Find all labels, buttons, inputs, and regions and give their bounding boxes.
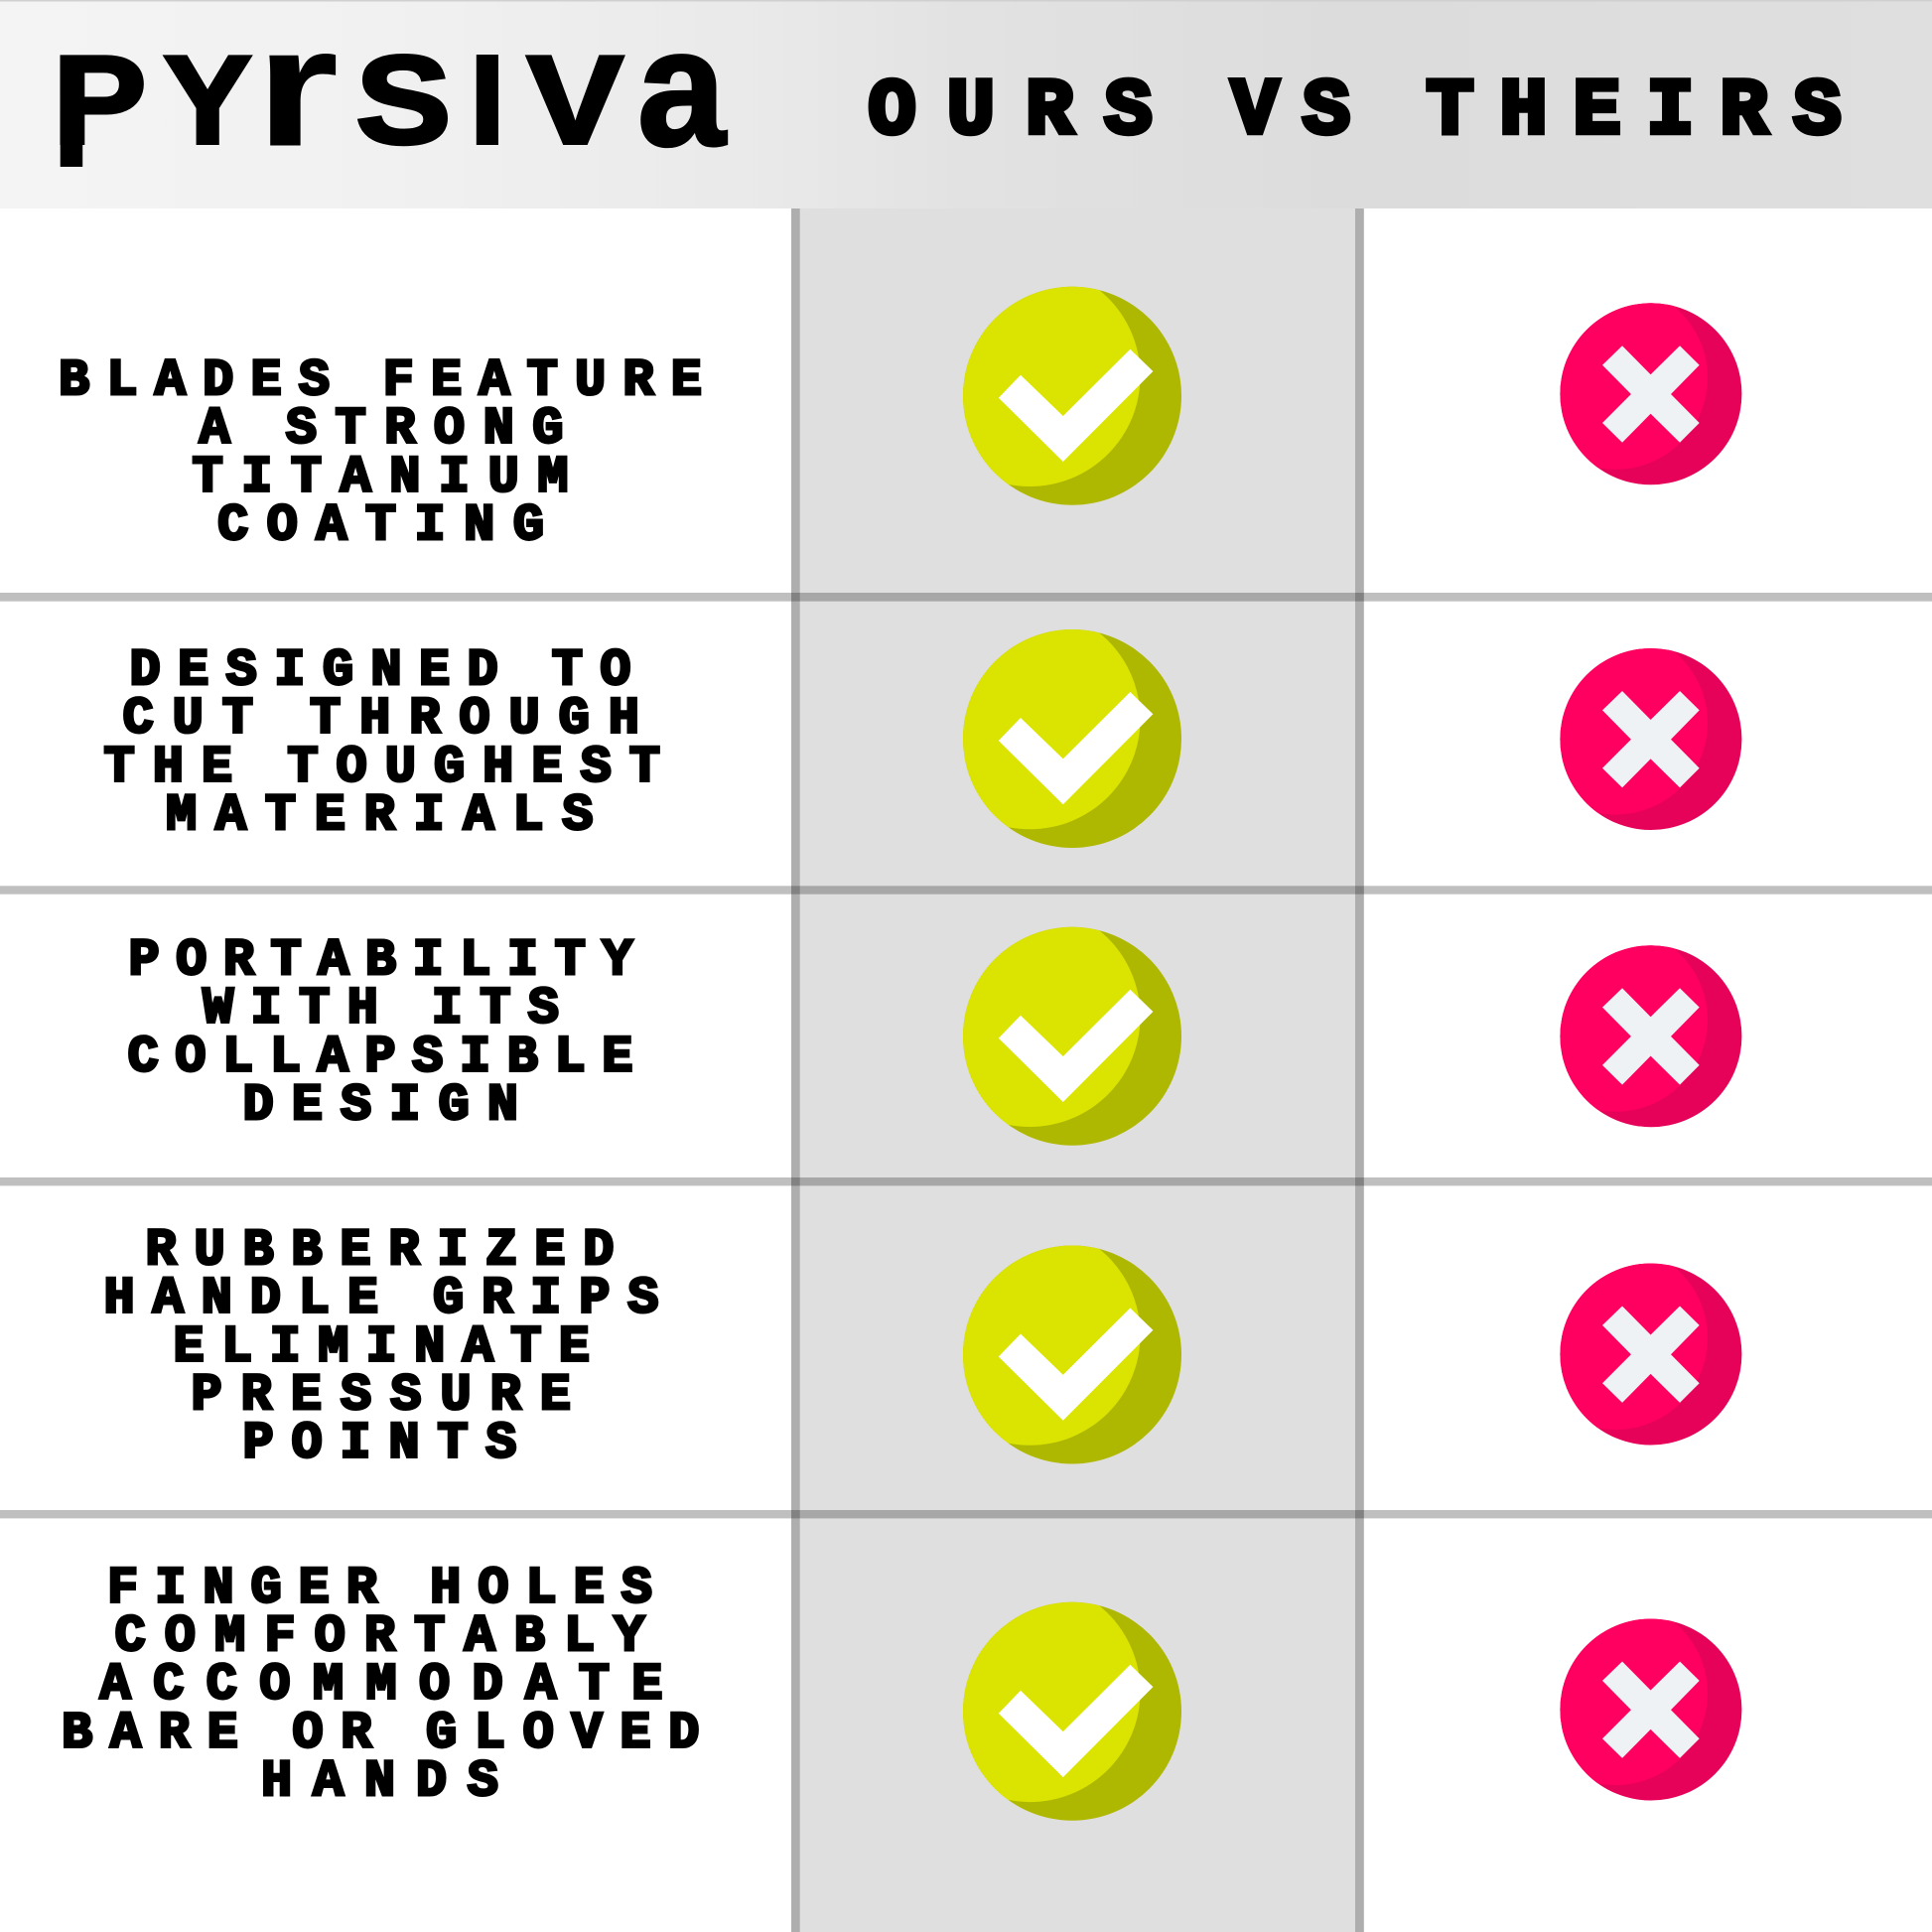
panel: ours column background	[791, 208, 1364, 1932]
label: row 4 text: HANDLE GRIPS	[103, 1270, 659, 1328]
label: row 5 text: COMFORTABLY	[115, 1607, 645, 1666]
icon: red cross	[1560, 1618, 1741, 1801]
label: row 1 text: COATING	[217, 496, 544, 555]
label: row 5 text: HANDS	[261, 1752, 498, 1811]
label: row 2 text: CUT THROUGH	[123, 690, 639, 749]
label: row 5 text: BARE OR GLOVED	[62, 1704, 699, 1762]
logo: PYRSIVA: P	[53, 31, 146, 170]
row 5: finger holes	[62, 1559, 1741, 1821]
grid: vertical column dividers	[791, 208, 1364, 1932]
icon: red cross	[1560, 1263, 1741, 1446]
row 2: toughest materials	[103, 609, 1741, 848]
logo: PYRSIVA: V	[527, 30, 623, 170]
label: row 1 text: BLADES FEATURE	[59, 351, 702, 410]
label: row 3 text: PORTABILITY	[129, 931, 633, 990]
label: row 1 text: TITANIUM	[193, 448, 568, 506]
label: row 4 text: RUBBERIZED	[145, 1221, 614, 1280]
label: row 1 text: A STRONG	[199, 400, 564, 459]
icon: green check	[963, 1602, 1181, 1821]
label: row 4 text	[103, 1221, 659, 1473]
row 4: rubberized grips	[103, 1221, 1741, 1473]
icon: green check	[963, 1245, 1181, 1463]
icon: red cross	[1560, 303, 1741, 484]
label: row 5 text	[62, 1559, 699, 1811]
label: row 2 text	[103, 641, 660, 845]
row 3: collapsible design	[127, 905, 1741, 1146]
label: row 5 text: ACCOMMODATE	[99, 1656, 663, 1715]
label: row 2 text: DESIGNED TO	[129, 641, 631, 700]
grid: horizontal row dividers	[0, 593, 1932, 1518]
label: row 4 text: PRESSURE	[191, 1366, 571, 1425]
label: row 3 text: DESIGN	[242, 1076, 518, 1135]
icon: green check	[963, 629, 1181, 848]
label: row 3 text: COLLAPSIBLE	[127, 1028, 633, 1086]
label: row 5 text: FINGER HOLES	[107, 1559, 652, 1617]
label: row 3 text: WITH ITS	[203, 980, 559, 1038]
heading: ours vs theirs: THEIRS	[1426, 68, 1841, 157]
label: row 1 text	[59, 351, 702, 555]
header band	[0, 0, 1932, 208]
icon: green check	[963, 927, 1181, 1146]
logo: PYRSIVA	[53, 0, 728, 181]
logo: PYRSIVA: Y	[164, 31, 251, 170]
label: row 4 text: POINTS	[242, 1415, 516, 1473]
heading: ours vs theirs: VS	[1231, 68, 1350, 157]
row 1: titanium coating	[60, 286, 1741, 541]
icon: green check	[963, 286, 1181, 505]
logo: PYRSIVA: I	[470, 30, 504, 170]
icon: red cross	[1560, 648, 1741, 830]
logo: PYRSIVA: S	[355, 30, 451, 170]
label: row 2 text: THE TOUGHEST	[103, 738, 660, 796]
label: row 2 text: MATERIALS	[166, 786, 594, 845]
label: row 3 text	[127, 931, 633, 1135]
label: row 4 text: ELIMINATE	[173, 1317, 590, 1376]
heading: ours vs theirs: OURS	[868, 68, 1152, 157]
icon: red cross	[1560, 945, 1741, 1128]
heading: ours vs theirs	[868, 68, 1841, 157]
